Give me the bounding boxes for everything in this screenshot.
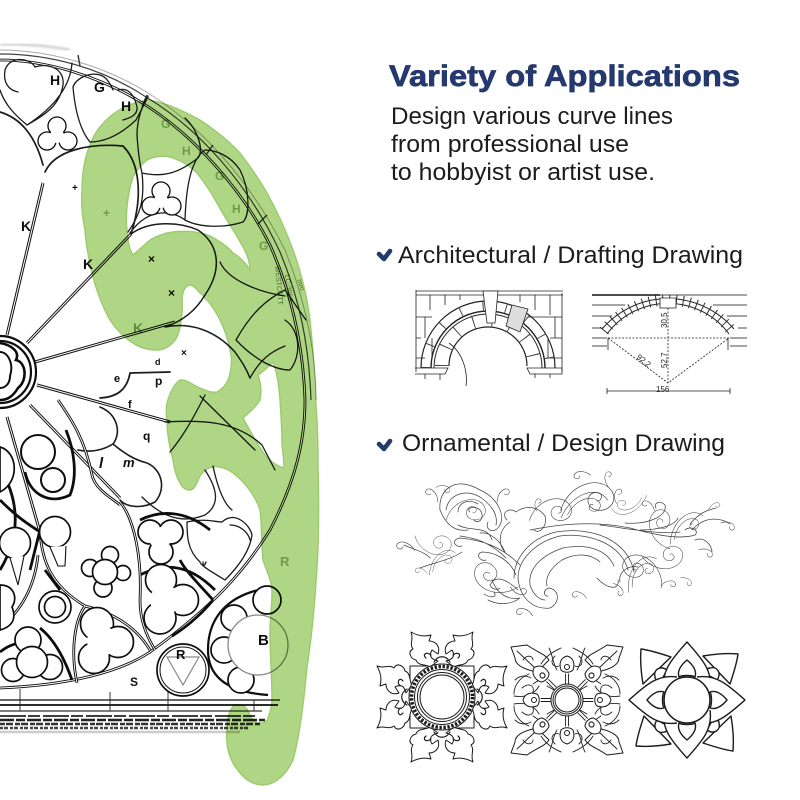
rose window drawing	[0, 44, 316, 732]
heading: architectural drawing: Architectural / Drafting Drawing	[398, 242, 743, 269]
illustration: segmental arch with dimensions: 156	[656, 385, 670, 394]
quatrefoil	[15, 627, 41, 653]
letter annotations: G	[94, 79, 105, 95]
ruler printed marks: R	[280, 554, 290, 569]
heading: ornamental drawing: Ornamental / Design Drawing	[402, 430, 725, 457]
big trefoils	[80, 608, 114, 640]
ruler printed marks: H	[182, 144, 191, 158]
letter annotations: +	[72, 183, 78, 194]
letter annotations: H	[50, 72, 60, 88]
intro text: to hobbyist or artist use.	[391, 159, 655, 186]
letter annotations: e	[114, 373, 120, 385]
upper trefoils	[38, 117, 181, 215]
letter annotations: q	[143, 429, 150, 443]
spokes	[7, 183, 175, 532]
base lines of drawing	[0, 689, 280, 732]
letter annotations: S	[130, 675, 138, 689]
letter annotations: H	[121, 98, 131, 114]
illustration: segmental arch with dimensions	[592, 295, 747, 394]
letter annotations: R	[176, 647, 186, 662]
ruler engraved model text	[273, 266, 305, 306]
illustration: segmental arch with dimensions: 52,7	[660, 352, 669, 368]
ruler printed marks: G	[259, 239, 268, 253]
letter annotations: ×	[148, 252, 155, 266]
lower circles and trefoils	[0, 435, 288, 696]
letter annotations: K	[21, 218, 31, 234]
ornament: lotus flower	[629, 642, 745, 758]
letter annotations: p	[155, 374, 162, 388]
central hub	[0, 336, 36, 408]
tracery curves	[0, 60, 306, 580]
letter annotations: B	[258, 632, 269, 649]
ruler printed marks: H	[232, 202, 241, 216]
green french curve ruler	[82, 100, 319, 785]
ruler engraved model text: LC-3060	[283, 274, 293, 302]
ruler printed marks: +	[103, 206, 110, 220]
ruler printed marks: K	[133, 320, 143, 336]
outer rim lines	[0, 50, 316, 688]
ornament: square floral tile	[511, 645, 623, 755]
intro text: Design various curve lines	[391, 103, 673, 130]
B rosette	[208, 588, 268, 695]
letter annotations: f	[128, 399, 132, 411]
intro text: from professional use	[391, 131, 629, 158]
scrollwork spirals	[397, 468, 736, 616]
illustration: floral scrollwork	[397, 468, 736, 616]
ruler printed marks	[103, 117, 290, 569]
letter annotations: m	[123, 455, 135, 470]
ruler printed marks: G	[161, 117, 170, 131]
illustration: stone arch	[415, 290, 563, 386]
letter annotations: ×	[181, 348, 187, 359]
ruler printed marks: G	[215, 169, 224, 183]
letter annotations: d	[155, 357, 160, 367]
illustration: segmental arch with dimensions: 30,5	[660, 312, 669, 328]
intro text	[391, 103, 673, 186]
lower tracery bands	[0, 400, 215, 683]
icon: check mark 2	[379, 441, 390, 449]
letter annotations: K	[83, 256, 93, 272]
ruler engraved model text: mm	[295, 278, 305, 292]
top shadow of drawing	[0, 44, 70, 50]
title: Variety of Applications	[389, 60, 740, 93]
letter annotations	[21, 72, 269, 689]
ornament: leaf medallion	[377, 632, 507, 762]
illustration: segmental arch with dimensions: 92,2	[635, 352, 653, 370]
letter annotations: l	[99, 455, 104, 472]
letter annotations: ×	[168, 286, 175, 300]
icon: check mark 1	[379, 251, 390, 259]
ruler engraved model text: WESTCOTT	[273, 266, 283, 306]
flower cluster	[102, 546, 118, 564]
R panel	[157, 644, 209, 696]
